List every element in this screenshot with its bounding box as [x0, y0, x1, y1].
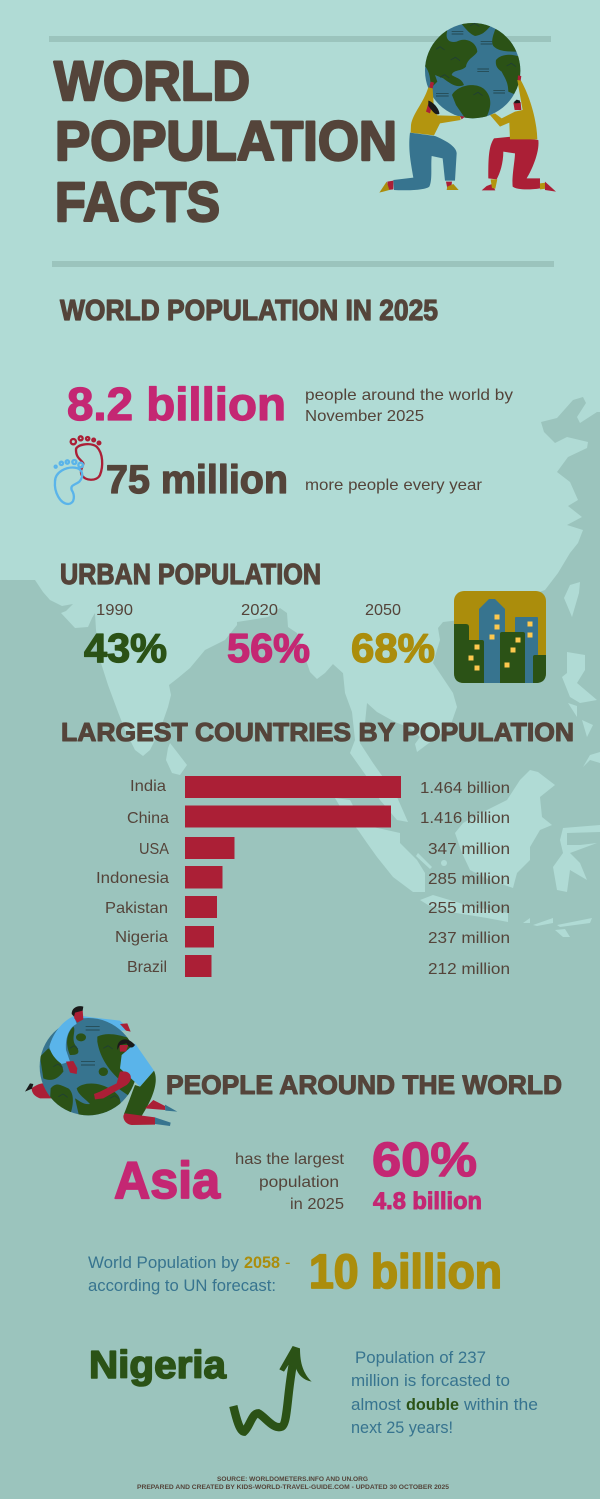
- stat: 8.2 billion: 8.2 billion: [67, 378, 286, 430]
- man behind globe: [25, 1015, 131, 1098]
- text: nigeria population forecast: almost: [351, 1396, 401, 1414]
- text: has the largest population: [235, 1151, 345, 1213]
- bar chart: largest countries: India: [130, 778, 166, 795]
- text: nigeria population forecast: million is forcasted to: [351, 1372, 510, 1390]
- illustration: people hugging the globe: [25, 1006, 177, 1126]
- text: people around the world: [305, 387, 513, 425]
- text: nigeria population forecast: Population of 237: [355, 1349, 486, 1367]
- background world map: [0, 397, 600, 1499]
- text: nigeria population forecast: double: [406, 1396, 459, 1414]
- text: world population by 2058: [88, 1254, 290, 1295]
- urban stat 1990: 43%: [84, 625, 167, 671]
- man: [482, 75, 556, 192]
- bar chart: largest countries: Indonesia: [96, 870, 169, 887]
- text: world population by 2058: -: [285, 1254, 290, 1272]
- urban stat 2020: [227, 602, 310, 671]
- urban stat 1990: 1990: [96, 602, 133, 619]
- bar chart: largest countries: Nigeria: [115, 929, 168, 946]
- heading: largest countries: LARGEST COUNTRIES BY POPULATION: [61, 717, 574, 747]
- title: FACTS: [55, 170, 220, 233]
- title: POPULATION: [55, 109, 397, 172]
- globe: [422, 20, 523, 120]
- bar chart: largest countries: 285 million: [428, 871, 510, 888]
- text: nigeria population forecast: [351, 1349, 538, 1437]
- text: people around the world: people around the world by: [305, 387, 513, 404]
- stat: 10 billion: 10 billion: [309, 1246, 502, 1299]
- urban stat 2050: 2050: [365, 602, 401, 619]
- divider top: [49, 36, 551, 42]
- divider under title: [52, 261, 554, 267]
- footer: source: SOURCE: WORLDOMETERS.INFO AND UN.ORG: [217, 1477, 368, 1483]
- heading: people around the world: PEOPLE AROUND THE WORLD: [166, 1070, 562, 1100]
- icon: city skyline: [454, 591, 546, 683]
- bar chart: largest countries: 237 million: [428, 930, 510, 947]
- text: world population by 2058: 2058: [244, 1254, 280, 1272]
- bar chart: largest countries: Pakistan: [105, 900, 168, 917]
- text: nigeria population forecast: next 25 years!: [351, 1419, 453, 1437]
- bar chart: largest countries: 1.416 billion: [420, 810, 510, 827]
- stat: 4.8 billion: 4.8 billion: [373, 1188, 482, 1215]
- arrow: rising growth: [233, 1346, 312, 1432]
- bar chart: largest countries: 347 million: [428, 841, 510, 858]
- woman: [379, 82, 465, 193]
- text: nigeria population forecast: within the: [463, 1396, 538, 1414]
- urban stat 2050: 68%: [351, 625, 435, 671]
- bar chart: largest countries: 212 million: [428, 961, 510, 978]
- figures in front of globe: [49, 1006, 177, 1126]
- text: people around the world: November 2025: [305, 408, 424, 425]
- bar chart: largest countries: [96, 776, 510, 978]
- bar chart: largest countries: Brazil: [127, 959, 167, 976]
- bar chart: largest countries: China: [127, 810, 169, 827]
- title: WORLD: [54, 49, 250, 112]
- urban stat 1990: [84, 602, 167, 671]
- footer: source: PREPARED AND CREATED BY KIDS-WORLD-TRAVEL-GUIDE.COM - UPDATED 30 OCTOBER 2025: [137, 1485, 450, 1491]
- footer: source: [137, 1477, 450, 1491]
- icon: footprints: [55, 436, 102, 504]
- text: more people every year: more people every year: [305, 477, 483, 494]
- text: world population by 2058: World Population by: [88, 1254, 240, 1272]
- title: [54, 49, 397, 233]
- bar chart: largest countries: USA: [139, 841, 169, 858]
- heading: world population in 2025: WORLD POPULATION IN 2025: [60, 295, 438, 327]
- illustration: two people holding up the globe: [379, 20, 556, 193]
- urban stat 2050: [351, 602, 435, 671]
- text: world population by 2058: according to UN forecast:: [88, 1277, 276, 1295]
- urban stat 2020: 56%: [227, 625, 310, 671]
- bar chart: largest countries: 1.464 billion: [420, 780, 510, 797]
- heading: urban population: URBAN POPULATION: [60, 559, 321, 591]
- stat: 75 million: 75 million: [106, 458, 288, 502]
- bar chart: largest countries: 255 million: [428, 900, 510, 917]
- text: has the largest population: has the largest: [235, 1151, 345, 1168]
- stat: Asia: Asia: [114, 1152, 221, 1210]
- globe: [40, 1018, 140, 1120]
- text: has the largest population: population: [259, 1174, 339, 1191]
- stat: 60 percent: 60%: [372, 1134, 477, 1187]
- text: has the largest population: in 2025: [290, 1196, 344, 1213]
- stat: Nigeria: Nigeria: [89, 1344, 226, 1387]
- urban stat 2020: 2020: [241, 602, 278, 619]
